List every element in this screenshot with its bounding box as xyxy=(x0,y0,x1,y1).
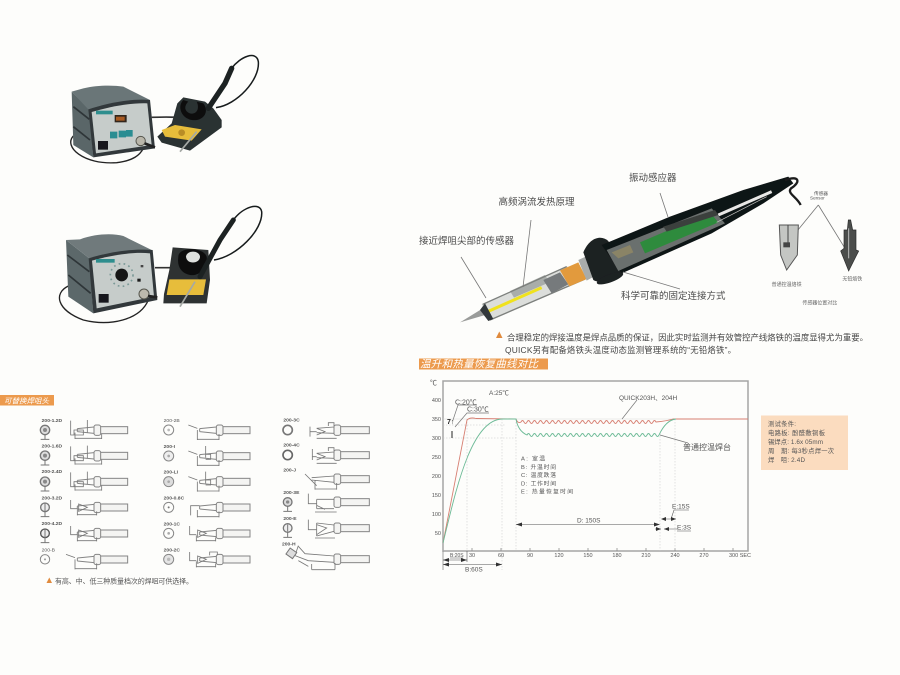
panel: test conditions: 焊 咀: 2.4D xyxy=(768,455,805,464)
time span annotations: B:60S xyxy=(465,566,483,574)
tip diagrams: column 2: 200-LI xyxy=(164,470,179,476)
time span annotations: E:15S xyxy=(672,504,690,510)
tip diagrams: column 3: 200-3C xyxy=(283,418,300,424)
line chart: heating and thermal recovery: 300 SEC xyxy=(729,553,751,559)
time span annotations: B:20S xyxy=(450,553,464,559)
legend: C: 温度跌落 xyxy=(521,471,556,479)
tip diagrams: column 1: 200-1.2D xyxy=(42,418,63,424)
legend xyxy=(521,454,573,496)
line chart: heating and thermal recovery: 150 xyxy=(583,553,593,559)
series: QUICK 203H/204H xyxy=(443,418,748,543)
note: temperature monitoring xyxy=(496,332,868,355)
line chart: heating and thermal recovery: 210 xyxy=(641,553,651,559)
tip diagrams: column 3 xyxy=(282,418,369,570)
axis labels: 150 xyxy=(432,493,441,499)
soldering iron cutaway illustration xyxy=(460,177,801,322)
legend: A: 室温 xyxy=(521,454,545,462)
line chart: heating and thermal recovery: 180 xyxy=(612,553,622,559)
line chart: heating and thermal recovery: 120 xyxy=(554,553,564,559)
tip diagrams: column 2: 200-2B xyxy=(164,418,180,424)
callouts on soldering iron: 接近焊咀尖部的传感器 xyxy=(419,235,515,247)
annotations: recovery temperature: C:30℃ xyxy=(467,406,489,414)
tip diagrams: column 2: 200-1C xyxy=(164,521,180,527)
tip diagrams: column 1: 200-B xyxy=(42,547,56,553)
time span annotations xyxy=(443,504,692,574)
axis labels: ℃ xyxy=(430,379,437,387)
line chart: heating and thermal recovery: 60 xyxy=(498,553,504,559)
tip diagrams: column 1 xyxy=(40,418,128,569)
callouts on soldering iron: 振动感应器 xyxy=(629,172,677,184)
tip diagrams: column 3: 200-E xyxy=(283,516,297,522)
tip diagrams: column 2: 200-I xyxy=(164,444,176,450)
axis labels: 200 xyxy=(432,474,441,480)
axis labels: 100 xyxy=(432,512,441,518)
panel: test conditions: 周 期: 每3秒点焊一次 xyxy=(768,446,835,455)
sensor comparison diagram: Sensor xyxy=(810,195,825,200)
time span annotations: D: 150S xyxy=(577,518,601,524)
product photo: analog soldering station xyxy=(59,206,262,322)
tip diagrams: column 1: 200-2.4D xyxy=(42,469,63,475)
legend: E: 热量恢复时间 xyxy=(521,488,573,496)
panel: test conditions: 测试条件: xyxy=(768,419,796,428)
sensor comparison diagram xyxy=(772,190,862,306)
tip diagrams: column 2 xyxy=(164,418,250,567)
sensor comparison diagram: 普通控温烙铁 xyxy=(772,281,802,288)
callouts on soldering iron: 高频涡流发热原理 xyxy=(498,196,575,208)
tip diagrams: column 3: 200-J xyxy=(283,468,296,474)
note: temperature monitoring: 合理稳定的焊接温度是焊点品质的保证，因此实时监测并有效管控产线烙铁的温度显得尤为重要。 xyxy=(507,332,868,342)
sensor comparison diagram: 传感器位置对比 xyxy=(802,299,837,306)
annotations: recovery temperature: QUICK203H、204H xyxy=(619,395,677,402)
annotations: recovery temperature: A:25℃ xyxy=(489,389,509,397)
sensor comparison diagram: 传感器 xyxy=(814,190,828,197)
tip diagrams: column 2: 200-2C xyxy=(164,547,180,553)
heading: heating and thermal recovery curves: 温升和热量恢复曲线对比 xyxy=(420,358,540,370)
line chart: heating and thermal recovery: 90 xyxy=(527,553,533,559)
callouts on soldering iron xyxy=(419,172,726,302)
axis labels: 400 xyxy=(432,398,441,404)
panel: test conditions xyxy=(761,416,848,470)
tip diagrams: column 1: 200-3.2D xyxy=(42,495,63,501)
chart frame and ticks xyxy=(443,381,748,570)
annotations: recovery temperature: 普通控温焊台 xyxy=(683,442,731,452)
series: ordinary temperature-controlled station xyxy=(443,419,676,543)
legend: D: 工作时间 xyxy=(521,479,556,487)
line chart: heating and thermal recovery xyxy=(430,379,751,574)
tip diagrams: column 1: 200-1.6D xyxy=(42,444,63,450)
callouts on soldering iron: 科学可靠的固定连接方式 xyxy=(621,290,726,302)
heading: replaceable tips: 可替换焊咀头 xyxy=(4,396,49,406)
tip diagrams: column 3: 200-H xyxy=(282,542,296,548)
line chart: heating and thermal recovery: 240 xyxy=(670,553,680,559)
time span annotations: E:3S xyxy=(677,524,692,532)
panel: test conditions: 锡焊点: 1.6x 05mm xyxy=(768,437,823,446)
tip diagrams: column 3: 200-4C xyxy=(283,443,300,449)
sensor comparison diagram: 无铅烙铁 xyxy=(842,276,862,283)
note: temperature monitoring: QUICK另有配备烙铁头温度动态监测管理系统的“无铅烙铁”。 xyxy=(505,345,736,355)
axis labels xyxy=(430,379,441,537)
axis labels: 50 xyxy=(435,531,441,537)
annotations: recovery temperature: 7↑ xyxy=(447,419,454,426)
panel: test conditions: 电路板: 酚醛敷铜板 xyxy=(768,428,826,437)
note: tip quality grades: 有高、中、低三种质量档次的焊咀可供选择。 xyxy=(55,576,193,586)
axis labels: 350 xyxy=(432,417,441,423)
line chart: heating and thermal recovery: 270 xyxy=(699,553,709,559)
axis labels: 250 xyxy=(432,455,441,461)
axis labels: 300 xyxy=(432,436,441,442)
tip diagrams: column 2: 200-0.8C xyxy=(164,495,185,501)
tip diagrams: column 1: 200-4.2D xyxy=(42,521,63,527)
annotations: recovery temperature: C:20℃ xyxy=(455,398,477,406)
line chart: heating and thermal recovery: 30 xyxy=(469,553,475,559)
legend: B: 升温时间 xyxy=(521,463,556,471)
tip diagrams: column 3: 200-3E xyxy=(283,490,300,496)
product photo: digital soldering station xyxy=(71,56,258,163)
annotations: recovery temperature xyxy=(447,389,731,452)
